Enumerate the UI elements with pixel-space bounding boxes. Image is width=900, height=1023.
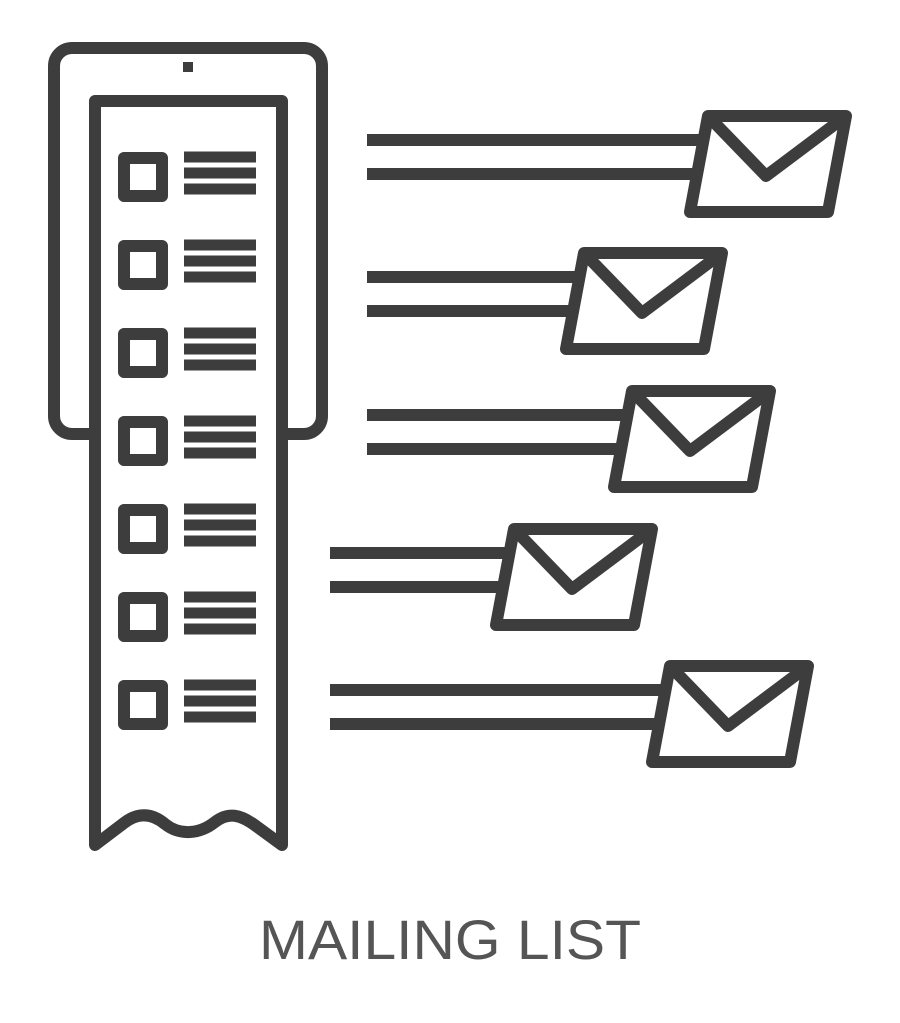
envelope 5 xyxy=(330,666,808,762)
envelope 4 xyxy=(330,529,652,625)
envelope 2 xyxy=(367,253,722,349)
envelope 1 xyxy=(367,116,846,212)
envelope 3 xyxy=(367,391,770,487)
title: MAILING LIST xyxy=(259,908,641,971)
paper: mailing list sheet xyxy=(95,101,282,845)
device: tablet frame xyxy=(54,48,322,434)
